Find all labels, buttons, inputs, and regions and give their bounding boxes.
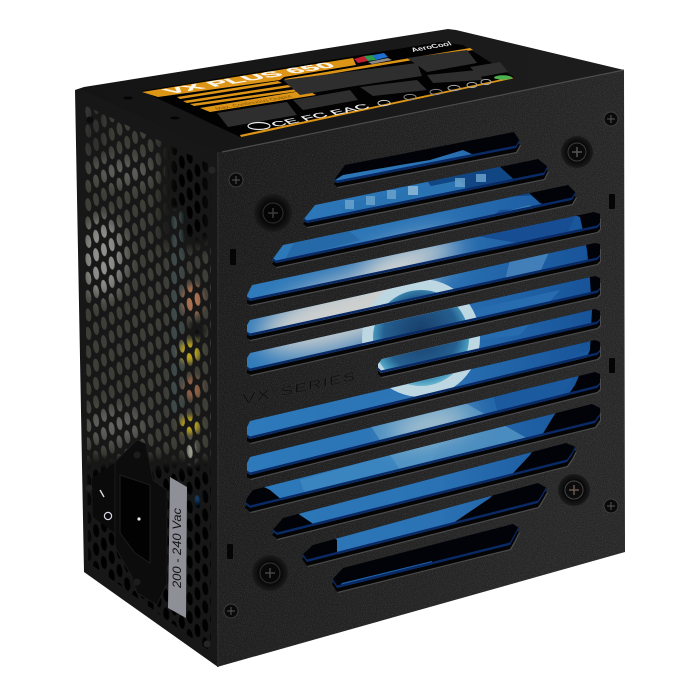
- orange stripes: [177, 81, 316, 112]
- title text: VX PLUS 650: [158, 61, 340, 96]
- small rivets: [86, 116, 94, 124]
- slot bevels: [246, 137, 601, 593]
- corner screws: small: [224, 112, 618, 618]
- fine print blocks: [217, 50, 508, 127]
- embossed series mark: VX: [240, 386, 273, 407]
- side panel with perforations: [75, 90, 220, 680]
- fan blades: [285, 167, 590, 510]
- spec label: [142, 40, 514, 137]
- certification marks: CE FC EAC: [269, 103, 373, 129]
- front face with fan grille: [210, 60, 630, 670]
- voltage sticker: 200 - 240 Vac: [172, 508, 184, 589]
- orange rules: [240, 48, 513, 137]
- corner screws: large: [252, 136, 593, 591]
- orange title band: [142, 58, 356, 97]
- top panel of chassis: [75, 29, 624, 152]
- voltage sticker: [168, 477, 187, 618]
- power switch: [92, 463, 116, 534]
- dark lower slot edge: [245, 140, 600, 588]
- RGB logo: [354, 53, 392, 64]
- blue strip in bottom slot: [338, 561, 432, 588]
- small mounting slots: [227, 194, 615, 559]
- power socket: [115, 440, 167, 605]
- embossed series mark: °SERIES: [272, 370, 356, 401]
- fan seen through slots: [245, 132, 600, 588]
- product illustration: power supply unit: [75, 29, 625, 667]
- brand text: AeroCool: [409, 40, 453, 53]
- fan hub: [362, 279, 480, 397]
- certification marks: [248, 75, 512, 130]
- embossed series mark: [240, 370, 356, 407]
- interior seen through holes: [85, 106, 211, 650]
- small vent squares: [345, 174, 486, 209]
- pale blade highlights: [250, 231, 474, 448]
- band caption: Max. Continuous Output: [214, 94, 294, 111]
